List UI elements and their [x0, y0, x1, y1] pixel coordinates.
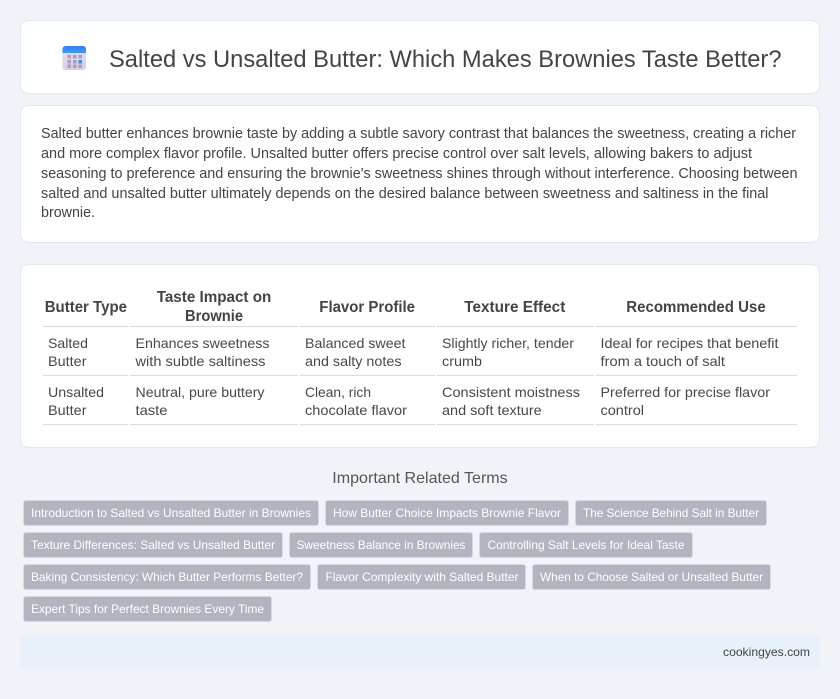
tag: Texture Differences: Salted vs Unsalted Butter: [31, 538, 275, 552]
table row: unsalted butter: Clean, rich: [305, 384, 371, 400]
table row: unsalted butter: Butter: [48, 402, 87, 418]
tag: [576, 500, 766, 526]
table row: unsalted butter: taste: [136, 402, 168, 418]
tag: How Butter Choice Impacts Brownie Flavor: [333, 506, 561, 520]
table header row: [45, 289, 766, 325]
heading: important related terms: Important Related Terms: [332, 470, 508, 487]
table row: salted butter: and salty notes: [305, 353, 402, 369]
tag: [24, 500, 318, 526]
table row: unsalted butter: and soft texture: [442, 402, 542, 418]
table row: salted butter: with subtle saltiness: [134, 353, 266, 369]
tag: Sweetness Balance in Brownies: [296, 538, 466, 552]
table row: salted butter: Slightly richer, tender: [442, 335, 574, 351]
tag: [290, 532, 472, 558]
table header row: Butter Type: [45, 299, 127, 316]
tag: The Science Behind Salt in Butter: [583, 506, 759, 520]
text block: summary: and more complex flavor profile. Unsalted butter offers precise control over salt levels, allowing bakers to adjust: [41, 146, 752, 162]
table row: unsalted butter: Preferred for precise flavor: [600, 384, 770, 400]
tag: Expert Tips for Perfect Brownies Every Time: [31, 602, 264, 616]
table row: unsalted butter: control: [600, 402, 644, 418]
tag: [24, 532, 282, 558]
tag: Flavor Complexity with Salted Butter: [326, 570, 519, 584]
table header row: Recommended Use: [626, 299, 766, 316]
tag: When to Choose Salted or Unsalted Butter: [540, 570, 763, 584]
related term tags: [24, 500, 770, 622]
text block: summary: [41, 126, 798, 221]
table row: unsalted butter: chocolate flavor: [305, 402, 407, 418]
tag: Controlling Salt Levels for Ideal Taste: [488, 538, 685, 552]
table row: salted butter: Balanced sweet: [305, 335, 406, 351]
table row: unsalted butter: Neutral, pure buttery: [136, 384, 264, 400]
table row: salted butter: Butter: [48, 353, 87, 369]
tag: [532, 564, 770, 590]
table row: unsalted butter: Consistent moistness: [442, 384, 580, 400]
table header row: Texture Effect: [464, 299, 566, 316]
table header row: Flavor Profile: [319, 299, 415, 316]
table row: salted butter: [48, 335, 779, 369]
text block: summary: salted and unsalted butter ultimately depends on the desired balance between sweetness and saltiness in the final: [41, 186, 768, 202]
table row: unsalted butter: [48, 384, 770, 418]
table row: unsalted butter: Unsalted: [48, 384, 104, 400]
icon: calendar: [62, 46, 86, 70]
panel: summary paragraph: [20, 106, 820, 242]
tag: [24, 596, 272, 622]
footer credit: cookingyes.com: [723, 645, 810, 659]
tag: Baking Consistency: Which Butter Performs Better?: [31, 570, 303, 584]
text block: summary: brownie.: [41, 205, 95, 221]
table row: salted butter: Salted: [48, 335, 88, 351]
table row: salted butter: Enhances sweetness: [136, 335, 270, 351]
tag: [326, 500, 568, 526]
text block: summary: Salted butter enhances brownie taste by adding a subtle savory contrast that balances the sweetness, creating a richer: [41, 126, 796, 142]
table row: salted butter: crumb: [442, 353, 482, 369]
tag: [480, 532, 692, 558]
table header row: Brownie: [185, 308, 243, 325]
footer bar: [20, 635, 820, 669]
table header row: Taste Impact on: [157, 289, 271, 306]
table row: salted butter: from a touch of salt: [600, 353, 725, 369]
text block: summary: seasoning to preference and ensuring the brownie's sweetness shines through without interference. Choosing between: [41, 166, 798, 182]
tag: Introduction to Salted vs Unsalted Butter in Brownies: [31, 506, 311, 520]
title: Salted vs Unsalted Butter: Which Makes Brownies Taste Better?: [109, 46, 782, 73]
panel: comparison table: [20, 264, 820, 448]
table row: salted butter: Ideal for recipes that benefit: [600, 335, 779, 351]
tag: [24, 564, 310, 590]
tag: [318, 564, 526, 590]
panel: header: [20, 20, 820, 94]
